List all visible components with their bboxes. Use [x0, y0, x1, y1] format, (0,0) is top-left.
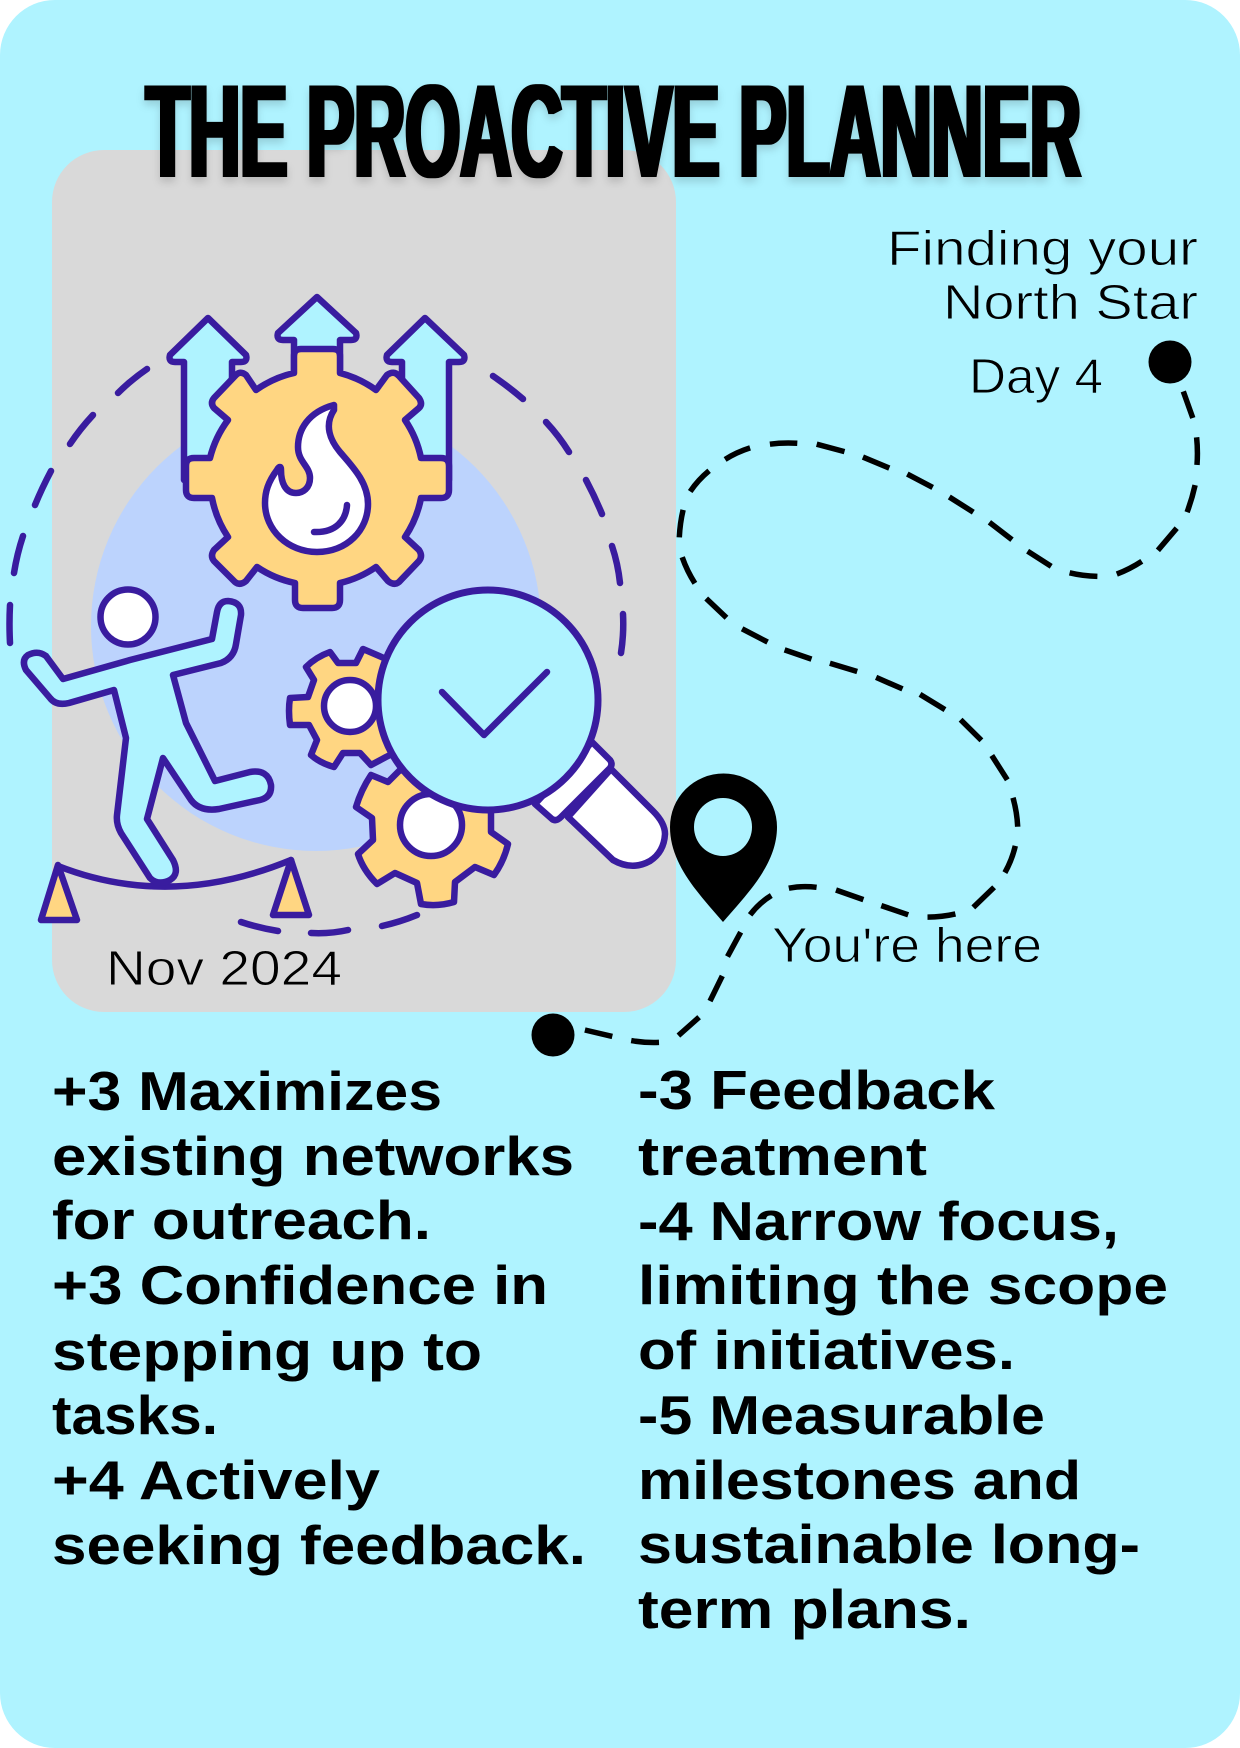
icon: location pin	[670, 773, 777, 922]
body	[24, 601, 271, 883]
text block: strengths: seeking feedback.	[52, 1514, 586, 1576]
text block: weaknesses: sustainable long-	[638, 1513, 1140, 1575]
icon: person balancing on a rope	[24, 590, 309, 920]
text block: weaknesses: -5 Measurable	[638, 1384, 1045, 1446]
start dot	[1148, 340, 1192, 384]
location label: You're here	[772, 919, 1042, 973]
head	[100, 590, 156, 644]
text block: weaknesses: of initiatives.	[638, 1319, 1015, 1381]
icon: magnifying glass with check	[378, 590, 665, 866]
icon: small gear	[289, 649, 400, 767]
text block: strengths: tasks.	[52, 1384, 218, 1446]
text block: weaknesses: -4 Narrow focus,	[638, 1190, 1119, 1252]
right post	[273, 860, 309, 915]
check mark	[442, 672, 547, 735]
icon: large gear	[186, 349, 449, 608]
end dot	[532, 1014, 574, 1056]
icon: lower gear	[356, 770, 508, 905]
text block: weaknesses: limiting the scope	[638, 1254, 1168, 1316]
date label: Nov 2024	[106, 942, 342, 996]
text block: weaknesses: -3 Feedback	[638, 1059, 995, 1121]
text block: weaknesses: milestones and	[638, 1449, 1081, 1511]
text block: strengths: +4 Actively	[52, 1449, 380, 1511]
illustration: proactive planning	[10, 297, 665, 933]
text block: weaknesses: treatment	[638, 1125, 927, 1187]
icon: three upward arrows	[170, 297, 464, 480]
subtitle	[887, 222, 1198, 330]
icon: flame	[265, 405, 368, 552]
text block: strengths	[52, 1060, 586, 1576]
dashed orbit	[10, 369, 623, 933]
text block: weaknesses: term plans.	[638, 1578, 971, 1640]
text block: weaknesses	[638, 1059, 1168, 1640]
subtitle: North Star	[943, 276, 1198, 330]
blue circle backdrop	[91, 401, 541, 851]
text block: strengths: +3 Confidence in	[52, 1254, 548, 1316]
day label: Day 4	[969, 350, 1103, 404]
panel: grey illustration backdrop	[52, 150, 676, 1012]
text block: strengths: existing networks	[52, 1125, 574, 1187]
text block: strengths: stepping up to	[52, 1320, 482, 1382]
text block: strengths: for outreach.	[52, 1189, 431, 1251]
text block: strengths: +3 Maximizes	[52, 1060, 442, 1122]
handle	[568, 769, 665, 866]
subtitle: Finding your	[887, 222, 1198, 276]
collar	[535, 742, 612, 820]
dashed journey path	[585, 391, 1197, 1043]
rope	[58, 860, 291, 887]
lens	[378, 590, 598, 810]
left post	[41, 865, 77, 920]
